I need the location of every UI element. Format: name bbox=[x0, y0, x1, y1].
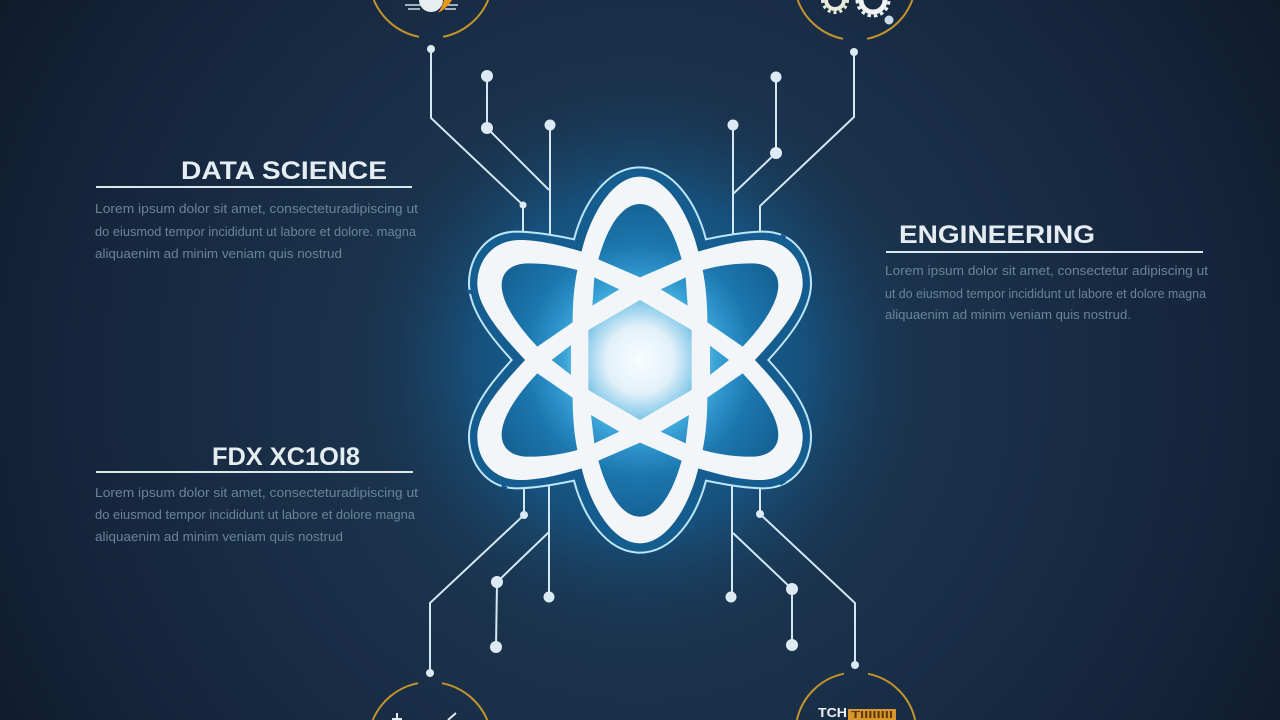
text block: third topic: do eiusmod tempor incididunt ut labore et dolore magna bbox=[95, 508, 415, 522]
outline gaps bbox=[467, 180, 785, 529]
heading: third topic: FDX XC1OI8 bbox=[212, 443, 360, 471]
text block: data science: Lorem ipsum dolor sit amet, consecteturadipiscing ut bbox=[95, 202, 419, 216]
icon: top left badge bbox=[374, 0, 488, 37]
text block: engineering bbox=[885, 264, 1209, 322]
text block: engineering: ut do eiusmod tempor incididunt ut labore et dolore magna bbox=[885, 287, 1206, 301]
orbit rings silhouette bbox=[477, 177, 803, 543]
text block: engineering: aliquaenim ad minim veniam quis nostrud. bbox=[885, 308, 1131, 322]
atom openings bbox=[502, 204, 778, 517]
atom emblem bbox=[467, 167, 811, 553]
circuit lines: top bbox=[427, 45, 858, 250]
icon: bottom right label bbox=[797, 674, 915, 720]
icon: bottom right label: TCH bbox=[818, 705, 847, 720]
top and bottom petals bbox=[598, 204, 682, 277]
panel: third topic bbox=[95, 443, 419, 544]
text block: third topic: aliquaenim ad minim veniam quis nostrud bbox=[95, 530, 343, 544]
text block: data science: do eiusmod tempor incididunt ut labore et dolore. magna bbox=[95, 225, 416, 239]
central blue glow bbox=[360, 80, 920, 640]
icon: top right gears bbox=[798, 0, 912, 39]
icon: bottom left chart bbox=[373, 683, 487, 720]
circuit lines: bottom bbox=[426, 475, 859, 677]
text block: third topic: Lorem ipsum dolor sit amet, consecteturadipiscing ut bbox=[95, 486, 419, 500]
text block: third topic bbox=[95, 486, 419, 544]
text block: data science bbox=[95, 202, 419, 261]
panel: data science bbox=[95, 157, 419, 261]
text block: data science: aliquaenim ad minim veniam quis nostrud bbox=[95, 247, 342, 261]
text block: engineering: Lorem ipsum dolor sit amet, consectetur adipiscing ut bbox=[885, 264, 1209, 278]
atom outline bbox=[469, 167, 811, 553]
central hexagon bbox=[588, 300, 692, 420]
heading: engineering: ENGINEERING bbox=[899, 221, 1095, 249]
side petals bbox=[502, 263, 577, 347]
heading: data science: DATA SCIENCE bbox=[181, 157, 387, 185]
panel: engineering bbox=[885, 221, 1209, 322]
small triangles bbox=[592, 277, 619, 306]
